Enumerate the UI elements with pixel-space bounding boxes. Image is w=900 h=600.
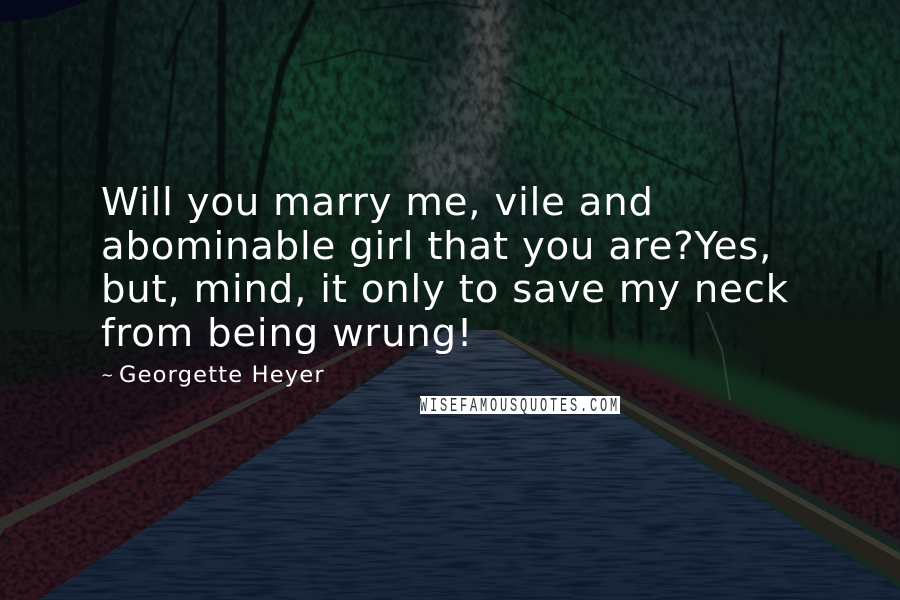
quote text: from being wrung! <box>101 311 473 356</box>
right-side pale sapling <box>707 312 730 400</box>
foliage texture <box>0 0 900 345</box>
quote text: but, mind, it only to save my neck <box>101 267 789 312</box>
quote text <box>101 180 789 356</box>
quote text: abominable girl that you are?Yes, <box>101 224 772 269</box>
ground: soft shadow <box>0 300 900 480</box>
attribution: Georgette Heyer <box>119 362 325 388</box>
sky gap between trees <box>410 0 508 190</box>
canopy patches <box>0 0 900 420</box>
brick road <box>38 330 900 600</box>
ground: left and right <box>0 335 900 600</box>
left kerb <box>0 342 372 536</box>
attribution: ~ <box>101 366 115 384</box>
right kerb <box>490 330 900 582</box>
tree trunks and branches <box>18 0 880 460</box>
quote text: Will you marry me, vile and <box>101 180 654 225</box>
leaf texture <box>0 330 460 600</box>
top corner shadow <box>0 0 90 22</box>
